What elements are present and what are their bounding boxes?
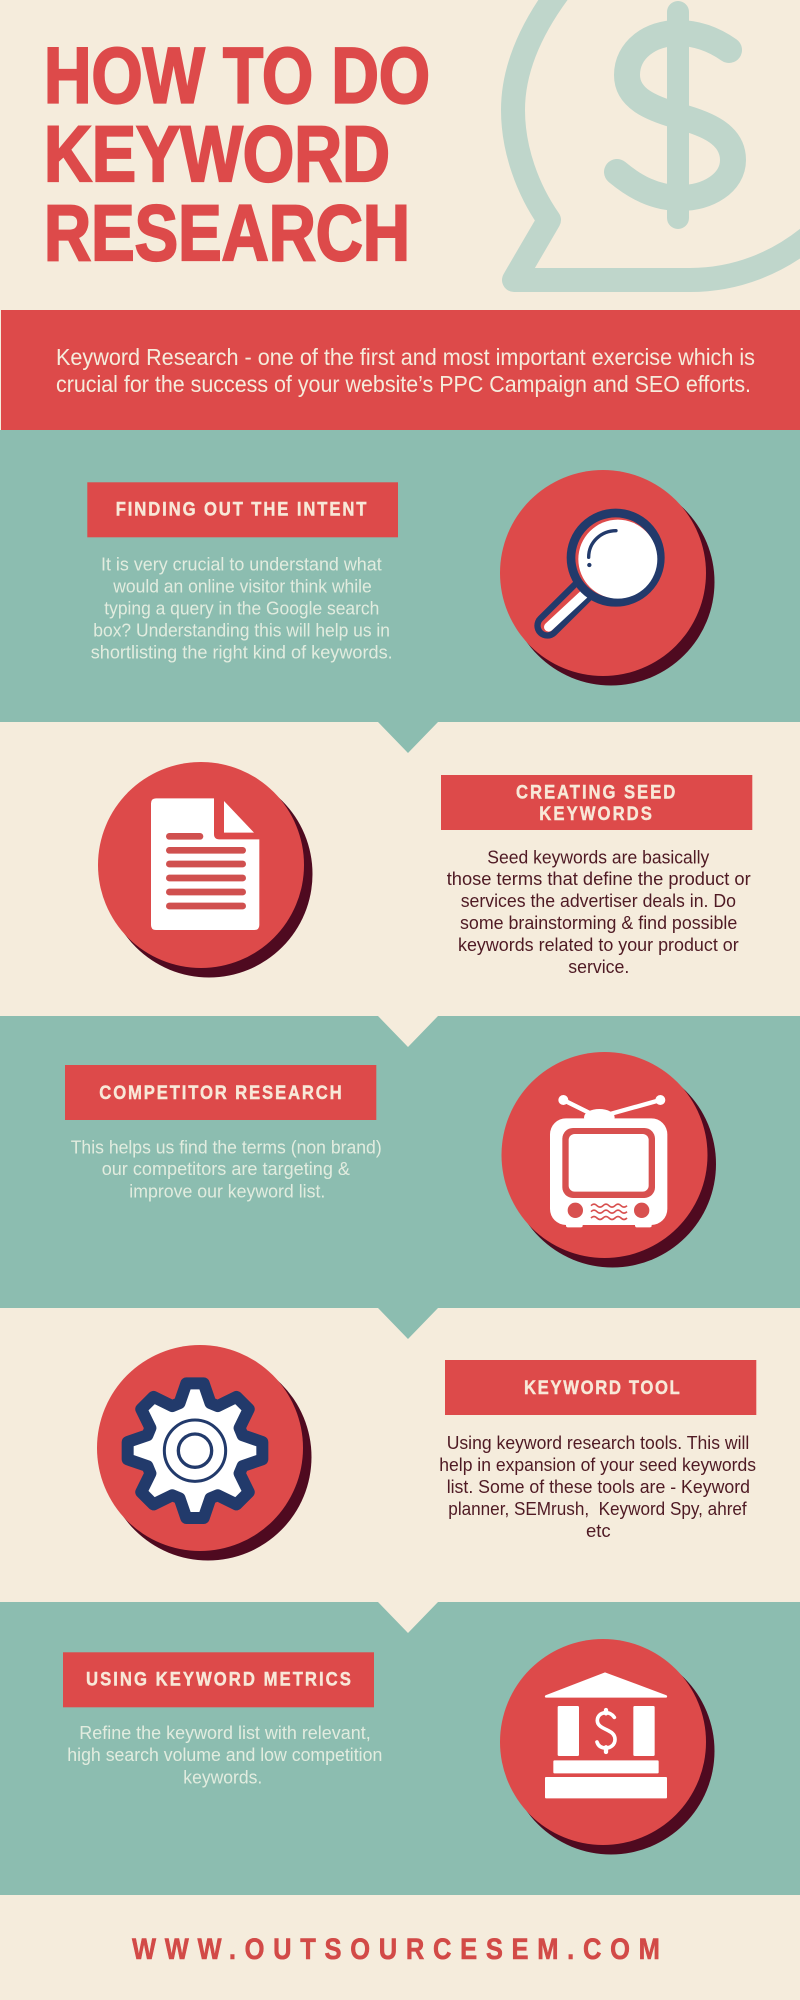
body text: intent	[91, 554, 393, 663]
body text: keyword metrics: high search volume and low competition	[67, 1744, 382, 1765]
body text: competitor research: our competitors are targeting &	[102, 1158, 351, 1179]
body text: competitor research: This helps us find the terms (non brand)	[71, 1136, 382, 1157]
heading box: using keyword metrics	[63, 1652, 374, 1707]
title	[44, 30, 430, 277]
icon: document in red circle	[98, 762, 312, 978]
body text: keyword tool: planner, SEMrush, Keyword Spy, ahref	[448, 1498, 747, 1519]
heading box: creating seed keywords: CREATING SEED	[516, 782, 675, 803]
body text: competitor research	[71, 1136, 382, 1201]
body text: keyword metrics: Refine the keyword list with relevant,	[79, 1722, 371, 1743]
body text: seed keywords: keywords related to your product or	[458, 934, 739, 955]
icon: television in red circle	[502, 1052, 716, 1268]
heading box: finding out the intent: FINDING OUT THE INTENT	[116, 499, 367, 520]
body text: keyword tool: Using keyword research tools. This will	[447, 1432, 749, 1453]
intro text	[56, 344, 755, 397]
body text: seed keywords: those terms that define the product or	[447, 868, 751, 889]
footer: website url	[0, 1895, 800, 2000]
body text: competitor research: improve our keyword list.	[129, 1180, 325, 1201]
panel: creating seed keywords	[0, 722, 800, 1016]
arrow: cream notch	[378, 1016, 438, 1047]
panel: finding out the intent	[0, 430, 800, 722]
body text: keyword tool: etc	[586, 1520, 611, 1541]
body text: seed keywords: Seed keywords are basically	[487, 846, 710, 867]
panel: intro band	[1, 310, 800, 430]
body text: seed keywords: services the advertiser deals in. Do	[461, 890, 736, 911]
body text: keyword tool: help in expansion of your seed keywords	[439, 1454, 756, 1475]
icon: speech bubble with dollar sign	[513, 0, 800, 280]
body text: keyword metrics	[67, 1722, 382, 1787]
arrow: teal notch	[378, 1308, 438, 1339]
body text: intent: box? Understanding this will help us in	[93, 620, 390, 641]
title: KEYWORD	[44, 109, 390, 198]
body text: seed keywords: some brainstorming & find possible	[460, 912, 737, 933]
icon: gear in red circle	[97, 1345, 312, 1560]
body text: seed keywords	[447, 846, 751, 977]
intro text: Keyword Research - one of the first and most important exercise which is	[56, 344, 755, 370]
panel: keyword tool	[0, 1308, 800, 1602]
panel: competitor research	[0, 1016, 800, 1308]
heading box: keyword tool: KEYWORD TOOL	[524, 1377, 680, 1398]
heading box: keyword tool	[445, 1360, 756, 1415]
body text: seed keywords: service.	[568, 956, 629, 977]
body text: keyword metrics: keywords.	[183, 1766, 262, 1787]
panel: using keyword metrics	[0, 1602, 800, 1895]
heading box: finding out the intent	[87, 482, 398, 537]
body text: intent: typing a query in the Google search	[104, 598, 379, 619]
body text: intent: It is very crucial to understand what	[101, 554, 382, 575]
arrow: teal notch	[378, 722, 438, 753]
icon: magnifying glass in red circle	[500, 470, 714, 686]
footer: website url: WWW.OUTSOURCESEM.COM	[132, 1932, 660, 1965]
intro text: crucial for the success of your website’s PPC Campaign and SEO efforts.	[56, 371, 751, 397]
heading box: creating seed keywords: KEYWORDS	[539, 803, 652, 824]
icon: bank in red circle	[500, 1639, 714, 1854]
body text: intent: shortlisting the right kind of keywords.	[91, 642, 393, 663]
heading box: using keyword metrics: USING KEYWORD METRICS	[86, 1669, 351, 1690]
body text: keyword tool	[439, 1432, 756, 1541]
body text: intent: would an online visitor think while	[112, 576, 372, 597]
arrow: cream notch	[378, 1602, 438, 1633]
title: HOW TO DO	[44, 30, 430, 119]
heading box: competitor research	[65, 1065, 376, 1120]
body text: keyword tool: list. Some of these tools are - Keyword	[447, 1476, 750, 1497]
heading box: creating seed keywords	[441, 775, 752, 830]
title: RESEARCH	[44, 188, 410, 277]
heading box: competitor research: COMPETITOR RESEARCH	[99, 1082, 342, 1103]
